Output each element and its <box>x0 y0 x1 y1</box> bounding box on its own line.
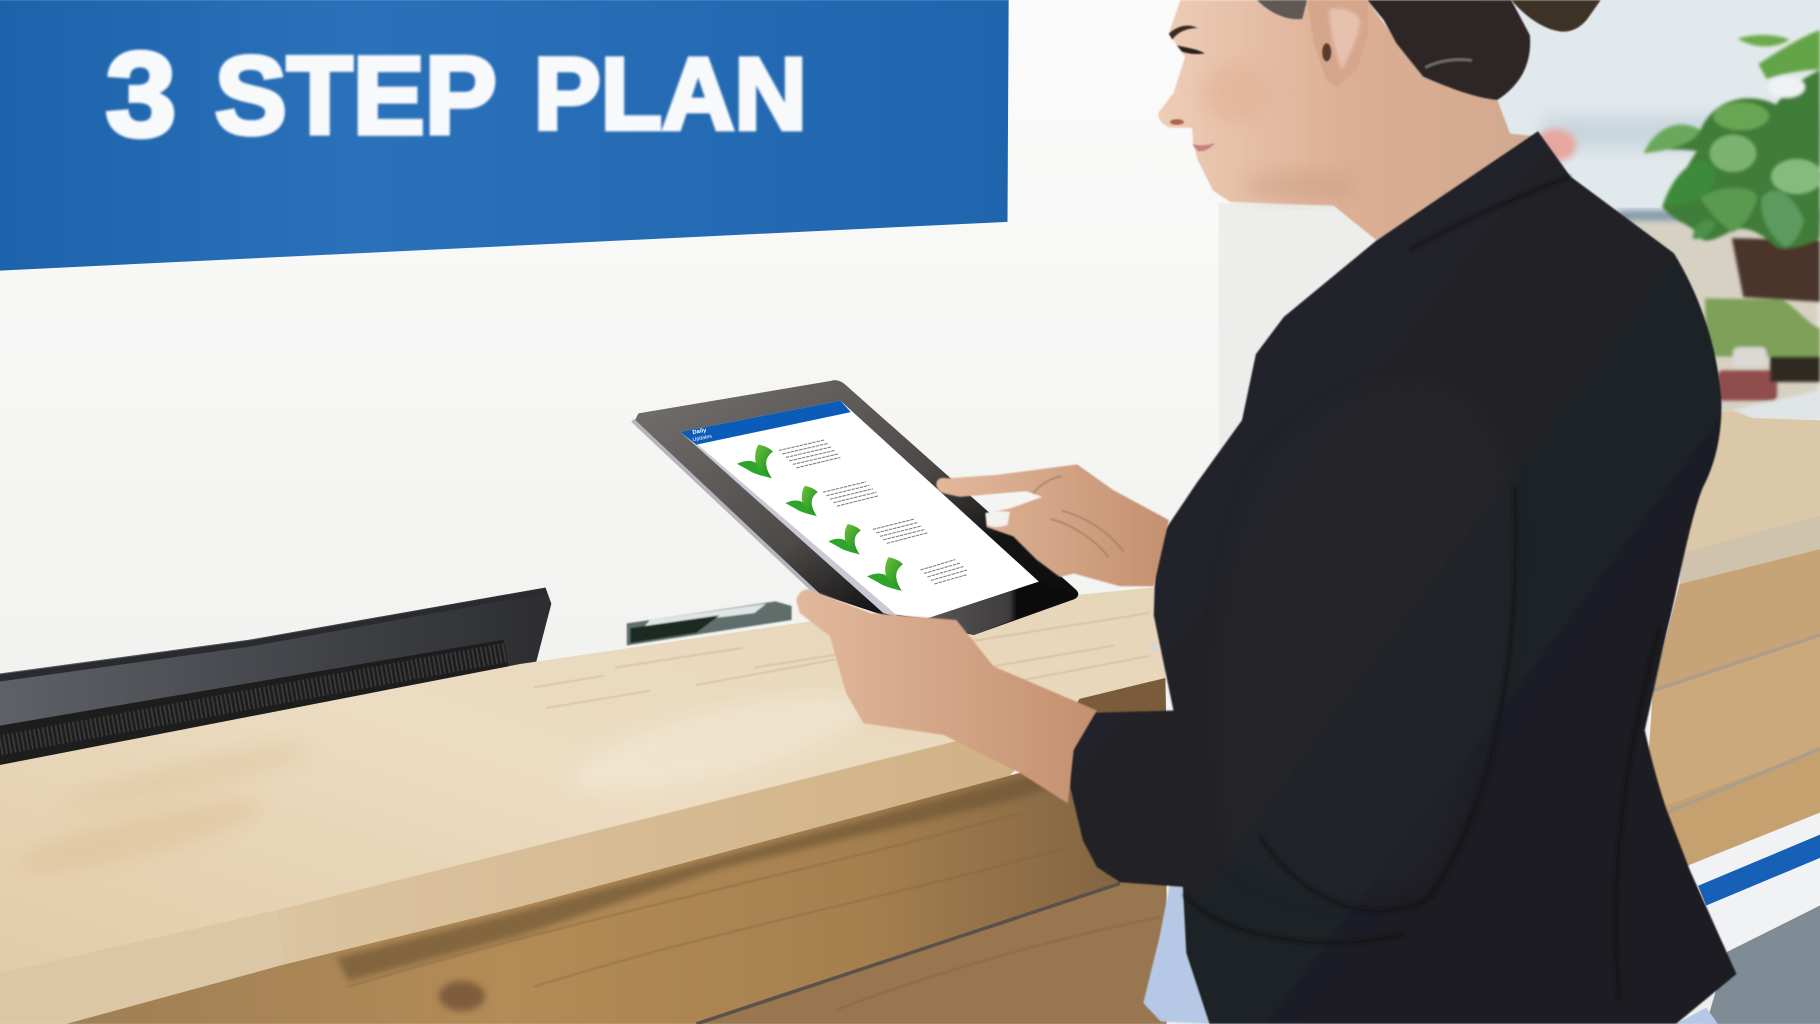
white base and blue stripe <box>1671 813 1820 952</box>
title: 3 STEP PLAN: PLAN <box>534 37 807 151</box>
grass tray <box>1705 298 1820 356</box>
main counter <box>0 586 1167 1024</box>
ear <box>1307 0 1368 87</box>
hair bun <box>1511 0 1601 32</box>
check leaf 4 <box>867 557 903 591</box>
black jacket <box>1070 131 1736 1024</box>
plant pot <box>1732 238 1820 302</box>
tablet <box>633 380 1078 635</box>
thumb nail <box>985 511 1010 527</box>
lips <box>1192 143 1215 151</box>
plant leaves <box>1644 30 1820 248</box>
red pot <box>1718 370 1777 401</box>
counter left corner <box>0 910 283 1024</box>
left hand holding tablet <box>796 590 1097 803</box>
check leaf 1 <box>737 445 773 478</box>
jacket sleeve highlight <box>1216 380 1512 899</box>
screen header <box>680 401 851 445</box>
wood grain <box>534 613 1149 708</box>
inner silver band <box>680 432 900 618</box>
neck and face <box>1158 0 1544 240</box>
knuckle creases <box>1033 476 1124 557</box>
computer monitor <box>0 587 551 766</box>
counter top surface <box>0 586 1165 973</box>
screen header: Daily <box>692 428 708 436</box>
check leaf 2 <box>785 486 818 516</box>
title: 3 STEP PLAN: 3 <box>106 28 176 161</box>
wooden panels <box>1653 549 1820 691</box>
neck shadow <box>1242 172 1358 200</box>
nostril <box>1170 119 1184 125</box>
floor <box>1706 905 1820 1024</box>
right counter section <box>1645 411 1820 1024</box>
lower front panel <box>66 734 1167 1024</box>
screen header: Updates <box>692 433 713 443</box>
tablet bottom reflection <box>926 582 1077 635</box>
title: 3 STEP PLAN <box>106 28 807 161</box>
white tray <box>1733 390 1820 420</box>
light blue shirt <box>1143 883 1209 1024</box>
item behind counter <box>627 601 792 645</box>
right hand on tablet <box>936 464 1169 586</box>
counter lip right <box>1680 515 1820 584</box>
plant in background <box>1644 30 1820 420</box>
counter top right <box>1683 411 1820 555</box>
shaded lip behind arm <box>1045 678 1167 769</box>
tablet silver edge <box>633 420 830 606</box>
bracelet detail <box>1150 643 1158 651</box>
lower right panel <box>696 873 1167 1024</box>
woman <box>1070 0 1736 1024</box>
cheek tone <box>1201 64 1271 122</box>
eyebrow and eye <box>1169 26 1205 54</box>
counter front lip <box>276 678 1165 965</box>
blue banner with title <box>0 0 1009 271</box>
title: 3 STEP PLAN: STEP <box>215 35 497 158</box>
monitor vent <box>0 640 508 765</box>
hair <box>1257 0 1530 100</box>
screen text lines <box>779 440 967 584</box>
check leaf 3 <box>828 524 861 554</box>
jacket folds <box>1184 177 1660 998</box>
tablet screen <box>680 401 1039 619</box>
tablet body <box>634 380 1078 635</box>
